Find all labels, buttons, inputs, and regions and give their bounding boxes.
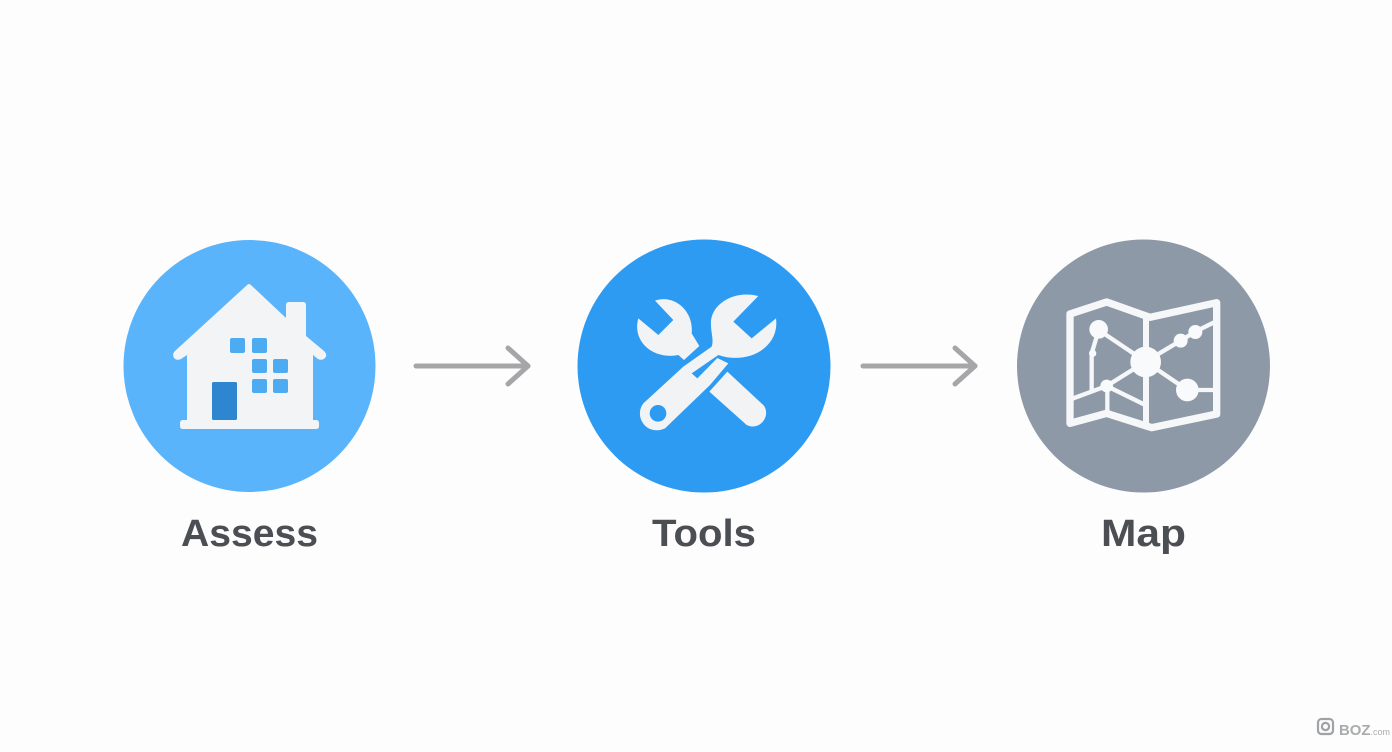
icon: folded map with network: [1070, 302, 1217, 428]
step 2: tools: [578, 240, 830, 555]
label: Tools: Tools: [652, 513, 756, 555]
arrow: tools to map: [863, 348, 975, 384]
icon: house: [173, 284, 326, 429]
watermark text: BOZ.com: [1339, 722, 1390, 739]
watermark: [1318, 719, 1390, 739]
step 3: map: [1017, 240, 1270, 555]
icon: watermark badge: [1318, 719, 1333, 734]
circle: map background: [1017, 240, 1270, 492]
step 1: assess: [124, 240, 376, 555]
icon: crossed wrenches: [637, 294, 776, 430]
label: Assess: Assess: [181, 513, 318, 555]
circle: assess background: [124, 240, 376, 492]
circle: tools background: [578, 240, 830, 492]
arrow: assess to tools: [416, 348, 528, 384]
label: Map: Map: [1101, 513, 1186, 555]
